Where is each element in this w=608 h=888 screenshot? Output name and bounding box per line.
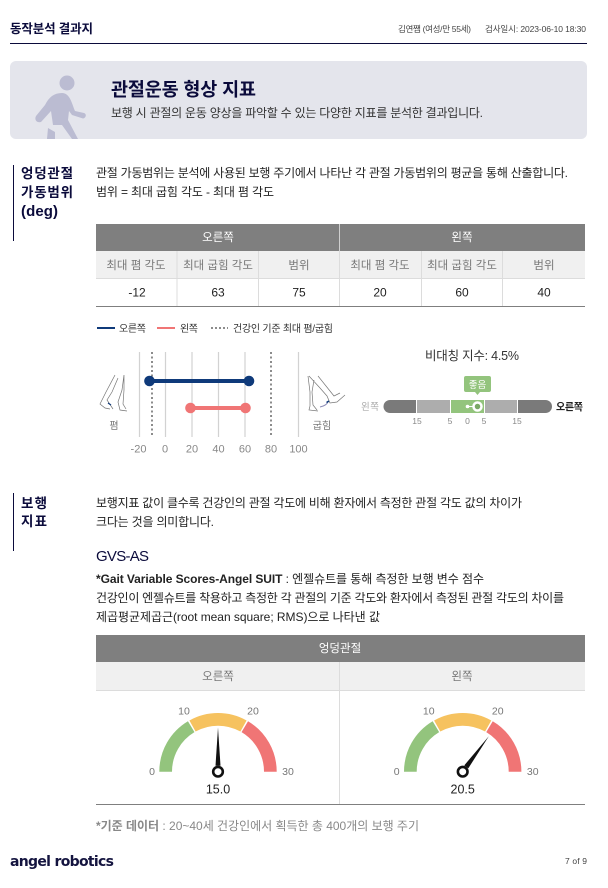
chart: asymmetry scale: 왼쪽 — [361, 402, 379, 413]
chart legend: 왼쪽 — [180, 323, 198, 335]
gauge: left 20.5: 10 — [423, 706, 435, 718]
text block: GVS-AS definition: *Gait Variable Scores-Angel SUIT : 엔젤슈트를 통해 측정한 보행 변수 점수 — [96, 571, 484, 586]
chart: joint range dumbbell: 60 — [239, 444, 251, 456]
table: range of motion values: 최대 폄 각도 — [350, 259, 410, 272]
page header — [10, 21, 587, 44]
chart: joint range dumbbell: 40 — [212, 444, 225, 456]
text block: range of motion description — [96, 165, 568, 199]
chart legend — [97, 323, 333, 335]
text block: gait index description — [96, 495, 522, 529]
footnote: reference data: *기준 데이터 : 20~40세 건강인에서 획득한 총 400개의 보행 주기 — [96, 818, 419, 833]
chart: asymmetry scale: 5 — [448, 416, 453, 426]
icon: extension legs — [100, 375, 127, 432]
table: GVS-AS gauges: 오른쪽 — [202, 670, 234, 683]
chart: asymmetry scale: 15 — [512, 416, 522, 426]
chart: asymmetry scale: 오른쪽 — [556, 402, 583, 414]
text block: gait index description: 크다는 것을 의미합니다. — [96, 515, 214, 529]
chart: asymmetry scale — [361, 376, 583, 426]
gauge: right 15.0: 0 — [149, 766, 155, 778]
section heading: gait index: 지표 — [21, 514, 47, 529]
section heading: gait index — [13, 493, 47, 551]
panel: section banner — [10, 61, 587, 139]
gauge: left 20.5: 30 — [527, 766, 539, 778]
icon: flexion legs — [308, 376, 345, 432]
table: range of motion values: 범위 — [533, 259, 555, 272]
table: range of motion values: 최대 폄 각도 — [106, 259, 166, 272]
gauge: right 15.0: 10 — [178, 706, 190, 718]
chart legend: 건강인 기준 최대 폄/굽힘 — [233, 323, 333, 335]
table: range of motion values: 오른쪽 — [202, 231, 234, 244]
chart: joint range dumbbell: 100 — [289, 444, 308, 456]
panel: section banner: 보행 시 관절의 운동 양상을 파악할 수 있는 다양한 지표를 분석한 결과입니다. — [111, 105, 483, 120]
section heading: hip range of motion — [13, 165, 73, 241]
section heading: hip range of motion: (deg) — [21, 203, 58, 220]
table: range of motion values: -12 — [128, 286, 146, 300]
table: range of motion values: 최대 굽힘 각도 — [427, 259, 497, 272]
page header: 검사일시: 2023-06-10 18:30 — [485, 24, 586, 34]
gauge: left 20.5: 20.5 — [451, 783, 475, 797]
logo: angel robotics: angel robotics — [10, 854, 114, 870]
badge: good — [464, 376, 491, 395]
chart: joint range dumbbell: 20 — [186, 444, 198, 456]
chart legend: 오른쪽 — [119, 323, 146, 335]
text block: gait index description: 보행지표 값이 클수록 건강인의 관절 각도에 비해 환자에서 측정한 관절 각도 값의 차이가 — [96, 495, 522, 510]
gauge: left 20.5 — [394, 706, 539, 797]
table: range of motion values: 60 — [455, 286, 469, 300]
page number: 7 of 9 — [565, 856, 587, 866]
gauge: right 15.0 — [149, 706, 294, 797]
asymmetry index title: 비대칭 지수: 4.5% — [425, 349, 519, 363]
subheading: GVS-AS: GVS-AS — [96, 548, 149, 565]
panel: section banner: 관절운동 형상 지표 — [111, 79, 256, 100]
gauge: left 20.5: 20 — [492, 706, 504, 718]
table: range of motion values: 범위 — [288, 259, 310, 272]
chart: joint range dumbbell — [131, 352, 308, 456]
table: range of motion values: 40 — [537, 286, 551, 300]
badge: good: 좋음 — [469, 380, 486, 391]
page header: 김연쨈 (여성/만 55세) — [398, 24, 471, 34]
table: GVS-AS gauges: 엉덩관절 — [319, 641, 361, 655]
table: range of motion values: 63 — [211, 286, 225, 300]
gauge: left 20.5: 0 — [394, 766, 400, 778]
table: range of motion values: 최대 굽힘 각도 — [183, 259, 253, 272]
text block: range of motion description: 범위 = 최대 굽힘 각도 - 최대 폄 각도 — [96, 185, 274, 199]
section heading: hip range of motion: 엉덩관절 — [21, 166, 73, 181]
bar: right side — [144, 376, 254, 386]
chart: joint range dumbbell: 80 — [265, 444, 277, 456]
gauge: right 15.0: 15.0 — [206, 783, 230, 797]
table: GVS-AS gauges — [96, 635, 585, 805]
text block: range of motion description: 관절 가동범위는 분석에 사용된 보행 주기에서 나타난 각 관절 가동범위의 평균을 통해 산출합니다. — [96, 165, 568, 180]
text block: GVS-AS definition — [96, 571, 564, 624]
chart: joint range dumbbell: 0 — [162, 444, 168, 456]
table: GVS-AS gauges: 왼쪽 — [451, 669, 473, 683]
bar: left side — [185, 403, 251, 413]
icon: walking person — [35, 76, 86, 139]
table: range of motion values: 75 — [292, 286, 306, 300]
marker — [466, 402, 482, 410]
icon: flexion legs: 굽힘 — [313, 420, 331, 432]
icon: extension legs: 폄 — [109, 420, 119, 432]
table: range of motion values: 왼쪽 — [451, 230, 473, 244]
gauge: right 15.0: 20 — [247, 706, 259, 718]
chart: asymmetry scale: 15 — [412, 416, 422, 426]
section heading: gait index: 보행 — [21, 496, 47, 511]
text block: GVS-AS definition: 건강인이 엔젤슈트를 착용하고 측정한 각 관절의 기준 각도와 환자에서 측정된 관절 각도의 차이를 — [96, 591, 564, 605]
chart: asymmetry scale: 5 — [482, 416, 487, 426]
table: range of motion values — [96, 224, 585, 307]
chart: asymmetry scale: 0 — [465, 416, 470, 426]
section heading: hip range of motion: 가동범위 — [21, 185, 73, 200]
gauge: right 15.0: 30 — [282, 766, 294, 778]
text block: GVS-AS definition: 제곱평균제곱근(root mean square; RMS)으로 나타낸 값 — [96, 610, 380, 624]
table: range of motion values: 20 — [373, 286, 387, 300]
page header: 동작분석 결과지 — [10, 21, 93, 36]
chart: joint range dumbbell: -20 — [131, 444, 146, 456]
